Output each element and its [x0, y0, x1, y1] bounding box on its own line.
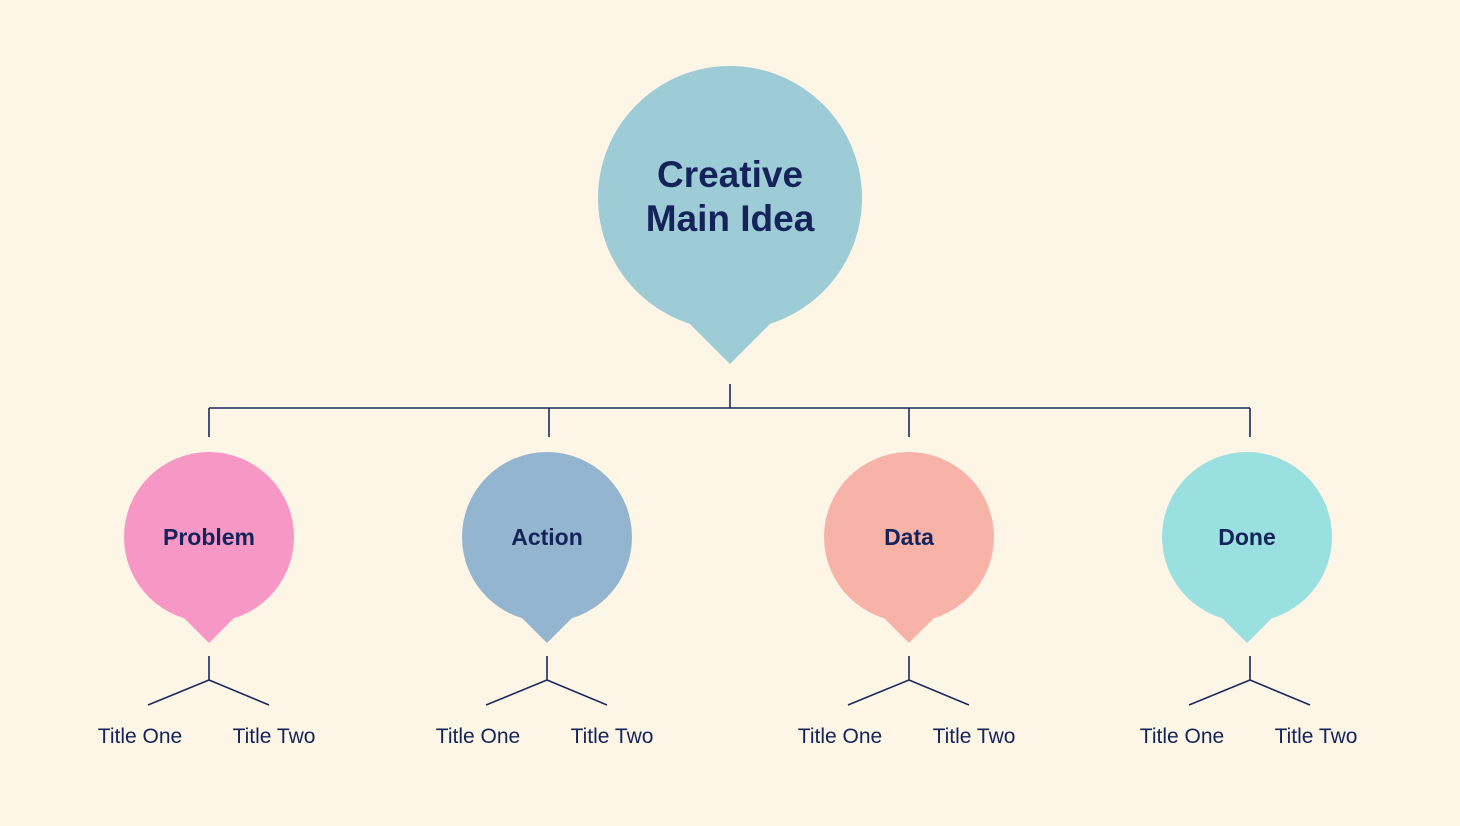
sub branches: Data [798, 656, 1015, 748]
bubble: Action [462, 452, 632, 643]
sub branches: Done: Title One [1140, 725, 1224, 748]
bubble: Data: Data [884, 524, 934, 550]
sub branches: Problem: Title Two [233, 725, 315, 748]
sub branches: Done [1140, 656, 1357, 748]
sub branches: Data: Title One [798, 725, 882, 748]
bubble: Action: Action [511, 524, 583, 550]
sub branches: Problem: Title One [98, 725, 182, 748]
connector tree [209, 384, 1250, 437]
bubble: Data [824, 452, 994, 643]
main idea bubble [598, 66, 862, 364]
bubble: Problem [124, 452, 294, 643]
main title: Creative [657, 154, 803, 195]
bubble: Done [1162, 452, 1332, 643]
sub branches: Done: Title Two [1275, 725, 1357, 748]
sub branches: Action: Title One [436, 725, 520, 748]
sub branches: Data: Title Two [933, 725, 1015, 748]
sub branches: Problem [98, 656, 315, 748]
sub branches: Action [436, 656, 653, 748]
sub branches: Action: Title Two [571, 725, 653, 748]
bubble: Done: Done [1218, 524, 1276, 550]
main idea bubble: Main Idea [646, 198, 815, 239]
bubble: Problem: Problem [163, 524, 255, 550]
